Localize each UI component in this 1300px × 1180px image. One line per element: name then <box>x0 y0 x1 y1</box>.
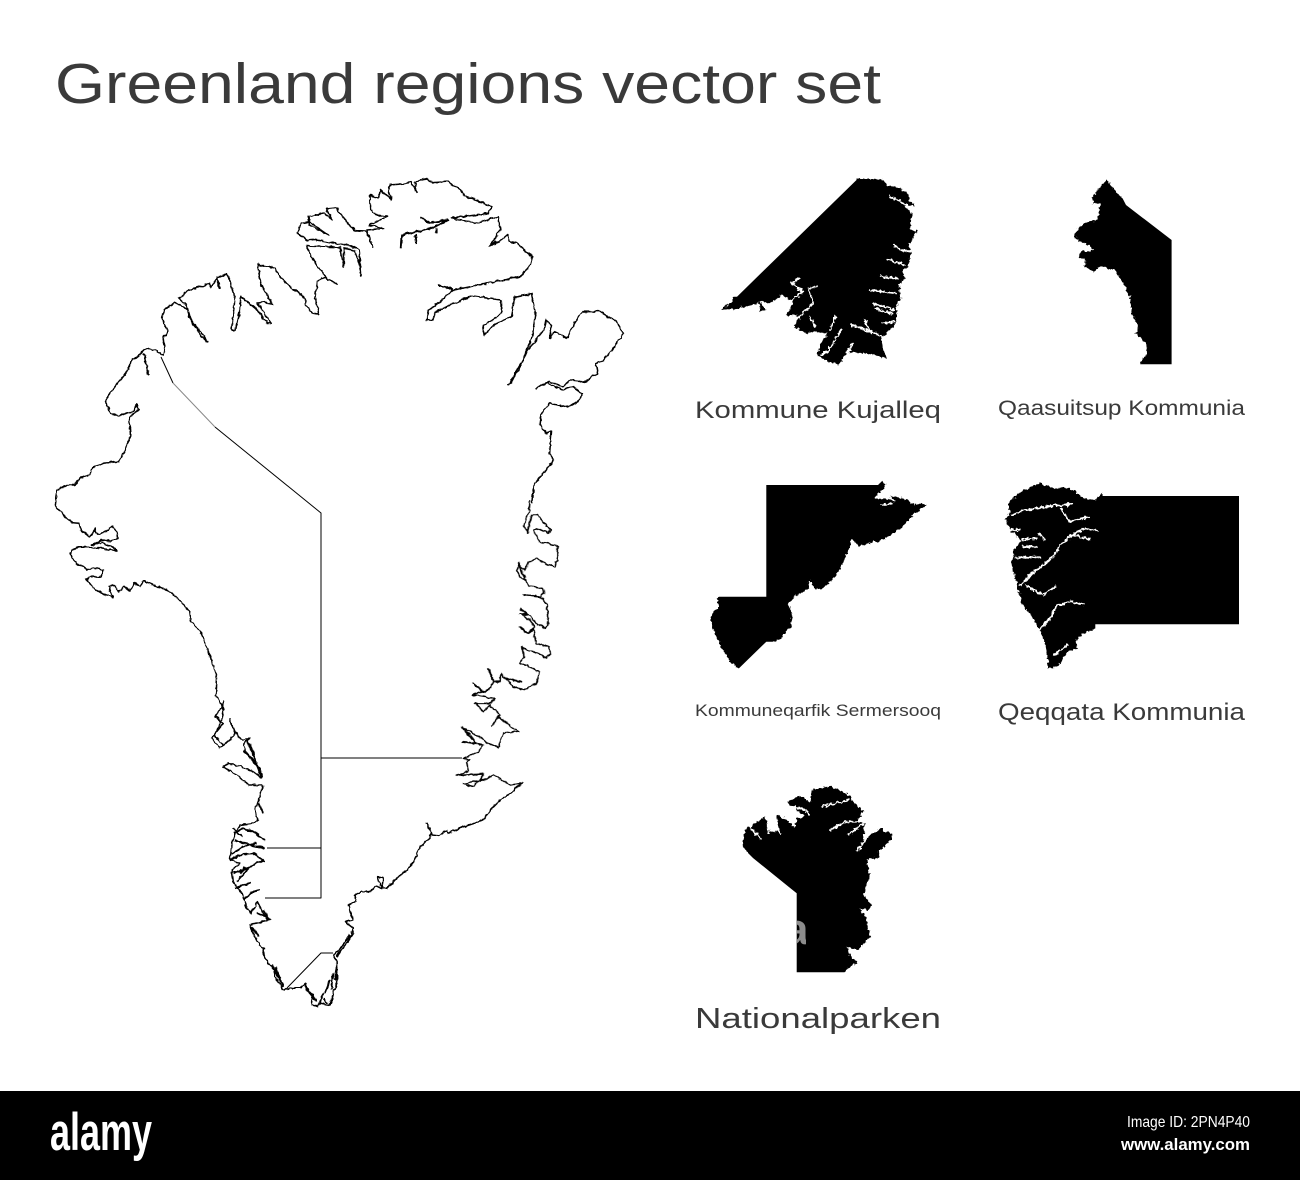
shape: Nationalparken <box>743 786 892 977</box>
shape: Qeqqata Kommunia <box>1006 483 1244 668</box>
coastline: north and northwest <box>55 179 623 597</box>
region boundaries <box>161 357 462 988</box>
map: Greenland regions outline <box>55 179 623 1007</box>
shape: Qaasuitsup Kommunia <box>1073 179 1175 367</box>
coastline <box>55 179 623 1007</box>
label: Qaasuitsup Kommunia: Qaasuitsup Kommunia <box>998 397 1245 420</box>
coastline: west to southwest link <box>173 594 224 745</box>
watermark fragment: a <box>784 905 809 954</box>
website: www.alamy.com <box>1120 1135 1250 1154</box>
title: Greenland regions vector set <box>55 52 881 116</box>
image id: Image ID: 2PN4P40 <box>1127 1114 1250 1131</box>
label: Nationalparken: Nationalparken <box>695 1003 941 1035</box>
coastline: southeast <box>283 783 523 1007</box>
coastline: southwest <box>212 700 283 990</box>
footer logo: alamy: alamy <box>50 1103 152 1162</box>
label: Qeqqata Kommunia: Qeqqata Kommunia <box>998 699 1246 726</box>
coastline: east <box>457 500 557 787</box>
label: Kommuneqarfik Sermersooq: Kommuneqarfik Sermersooq <box>695 701 941 720</box>
shape: Kommuneqarfik Sermersooq <box>710 482 927 671</box>
shape: Kommune Kujalleq <box>721 177 917 365</box>
footer bar <box>0 1091 1300 1180</box>
label: Kommune Kujalleq: Kommune Kujalleq <box>695 397 941 424</box>
